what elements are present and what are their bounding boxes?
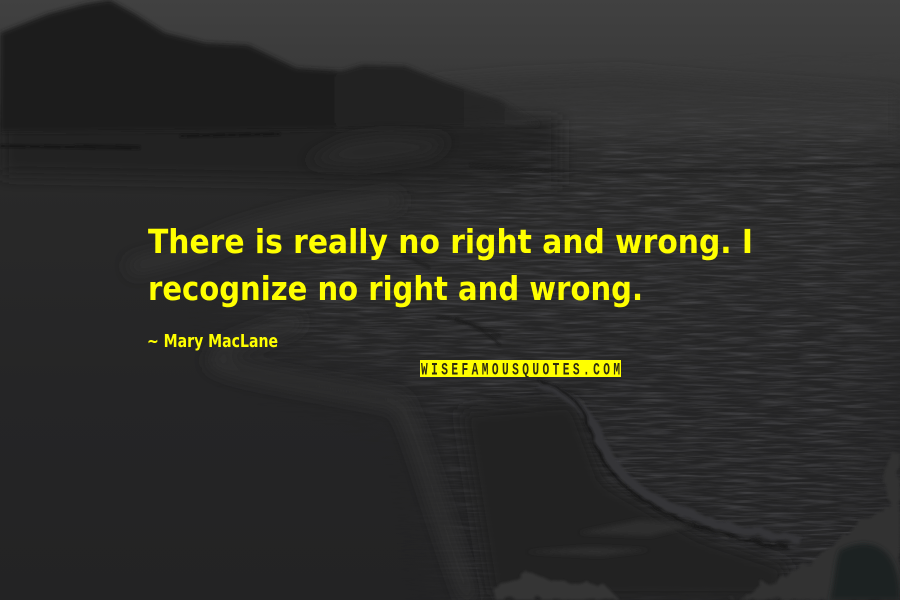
- quote line 1: There is really no right and wrong. I: [148, 222, 753, 261]
- pale upper streak: [130, 200, 400, 268]
- foam bottom: [495, 570, 620, 600]
- attribution: ~ Mary MacLane: [147, 331, 278, 352]
- watermark badge: WISEFAMOUSQUOTES.COM: [421, 361, 620, 381]
- distant headland: [430, 74, 900, 135]
- quote line 2: recognize no right and wrong.: [148, 269, 643, 308]
- damp sand: [460, 400, 790, 600]
- foam right rocks: [730, 452, 900, 600]
- dark wave lines: [375, 165, 900, 345]
- upper beach band: [0, 120, 560, 185]
- pale swash edge: [215, 320, 470, 600]
- dark hill: [0, 0, 540, 132]
- quote text: [148, 222, 753, 308]
- foam band: [540, 385, 800, 540]
- shoreline streaks under hill: [0, 134, 280, 148]
- foam shadow: [540, 381, 790, 548]
- texture water and wet sand: [258, 115, 900, 572]
- upper swash: [305, 136, 450, 165]
